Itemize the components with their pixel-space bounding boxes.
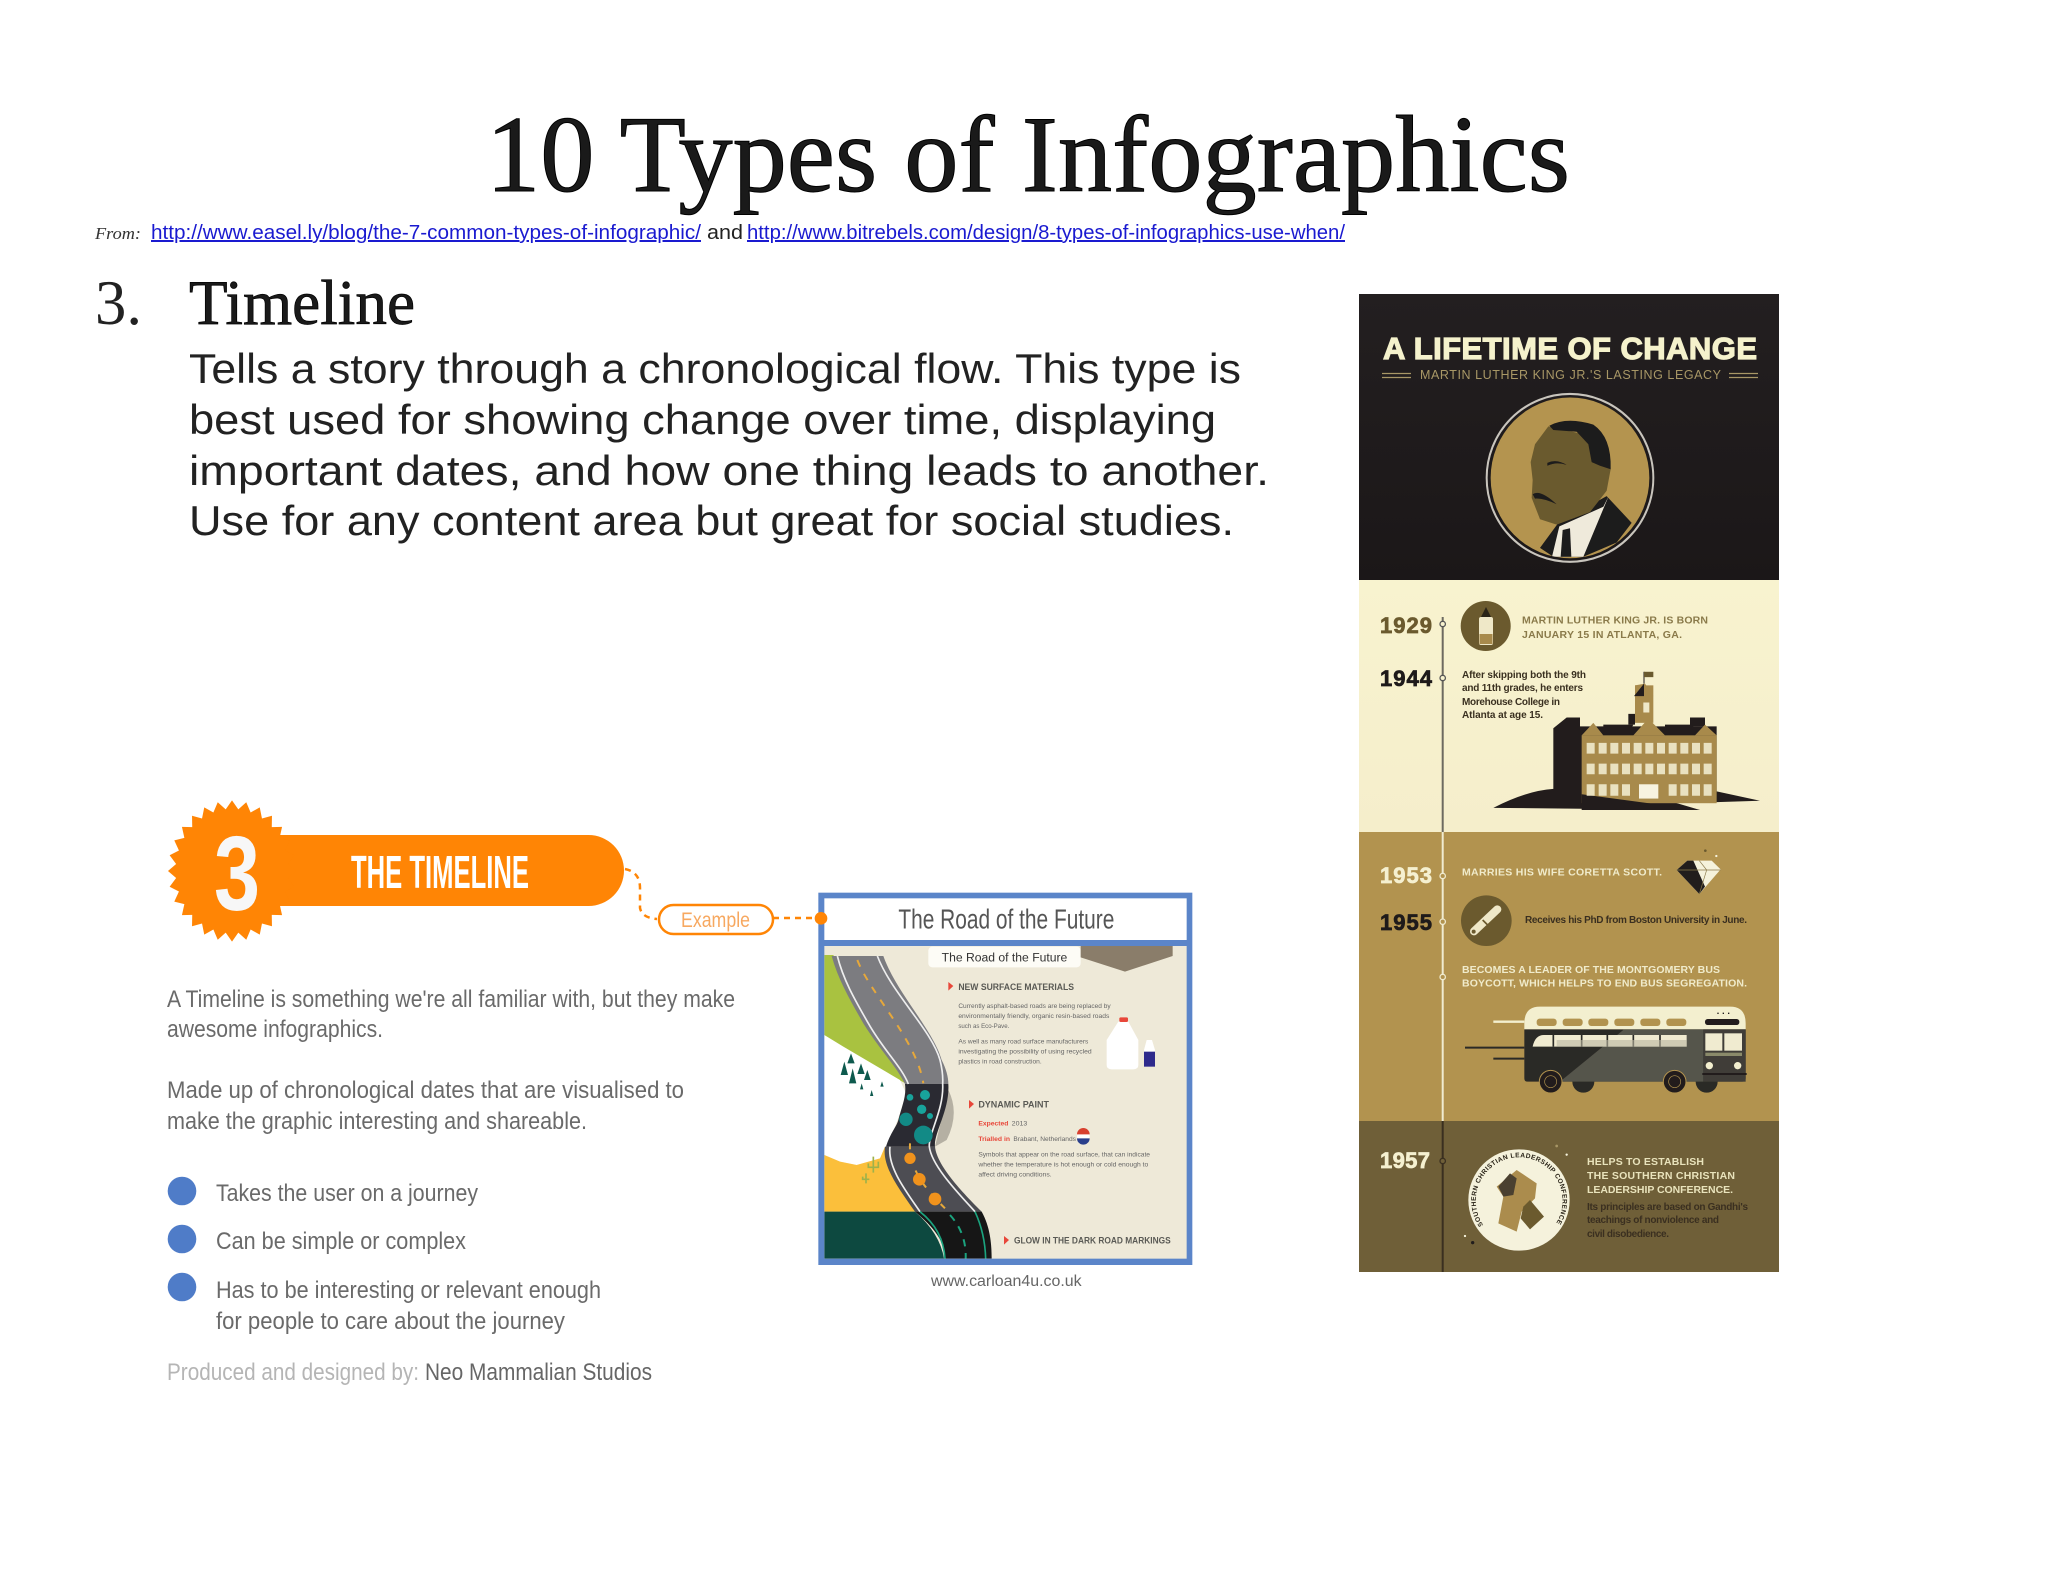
section: dynamic paint: Brabant, Netherlands [1013, 1136, 1077, 1143]
event 1944: 1944 [1380, 666, 1433, 691]
section: new surface materials: NEW SURFACE MATERIALS [958, 982, 1074, 992]
event 1957: THE SOUTHERN CHRISTIAN [1587, 1170, 1735, 1182]
timeline axis [1442, 617, 1444, 832]
blue frame and title band [818, 893, 1192, 1265]
section: new surface materials: plastics in road construction. [958, 1059, 1042, 1066]
intro paragraph: Made up of chronological dates that are visualised to [167, 1077, 684, 1104]
icon: conference badge with clasped hands [1464, 1144, 1570, 1251]
example pill: Example [681, 909, 750, 932]
event 1944: Atlanta at age 15. [1462, 710, 1543, 721]
portrait medallion [1487, 394, 1653, 562]
event 1957: HELPS TO ESTABLISH [1587, 1156, 1704, 1168]
event 1955: 1955 [1380, 910, 1432, 935]
illustration: college building [1493, 672, 1760, 810]
event: bus boycott: BECOMES A LEADER OF THE MONTGOMERY BUS [1462, 964, 1720, 976]
event 1944 [1380, 666, 1586, 721]
section: dynamic paint: 2013 [1012, 1121, 1028, 1128]
event 1957: 1957 [1380, 1148, 1430, 1173]
event 1953: MARRIES HIS WIFE CORETTA SCOTT. [1462, 867, 1662, 879]
example pill [659, 905, 773, 934]
description text: Tells a story through a chronological flow. This type is [189, 345, 1241, 392]
header title: A LIFETIME OF CHANGE [1383, 331, 1757, 366]
event: bus boycott [1440, 964, 1747, 990]
source line with links [94, 222, 1345, 244]
description text: Use for any content area but great for social studies. [189, 497, 1234, 544]
event 1929: 1929 [1380, 613, 1432, 638]
source line with links: http://www.easel.ly/blog/the-7-common-types-of-infographic/ [151, 222, 701, 244]
event 1953: 1953 [1380, 863, 1432, 888]
event 1957 [1380, 1148, 1748, 1240]
description text [189, 345, 1269, 544]
dark header background [1359, 294, 1779, 580]
panel: road of the future example [815, 893, 1192, 1290]
section: new surface materials: As well as many road surface manufacturers [958, 1039, 1089, 1046]
icon: orange number badge: 3 [214, 815, 260, 933]
section: dynamic paint: Symbols that appear on the road surface, that can indicate [978, 1151, 1150, 1158]
connector: dashed line to example [625, 869, 820, 919]
credit line: Produced and designed by: [167, 1359, 419, 1386]
section: dynamic paint: Expected [978, 1121, 1008, 1128]
event 1944: and 11th grades, he enters [1462, 683, 1583, 694]
event 1957: teachings of nonviolence and [1587, 1215, 1719, 1226]
section: dynamic paint: affect driving conditions. [978, 1171, 1052, 1178]
title: 10 Types of Infographics [486, 94, 1570, 215]
event 1953 [1380, 863, 1662, 888]
section heading: 3. [95, 267, 142, 338]
section heading: Timeline [189, 267, 415, 338]
event 1944: Morehouse College in [1462, 697, 1560, 708]
bullet list: Has to be interesting or relevant enough [216, 1277, 601, 1304]
event 1957: Its principles are based on Gandhi's [1587, 1202, 1748, 1213]
olive section background [1359, 1121, 1779, 1272]
credit line [167, 1359, 652, 1386]
intro paragraph: make the graphic interesting and shareable. [167, 1108, 587, 1135]
tan section background [1359, 832, 1779, 1121]
section: dynamic paint: Trialled in [978, 1136, 1010, 1143]
inner title: The Road of the Future [942, 951, 1067, 965]
source line with links: and [707, 222, 743, 244]
event 1929: MARTIN LUTHER KING JR. IS BORN [1522, 614, 1708, 626]
event 1955 [1380, 910, 1747, 935]
icon: orange number badge [168, 800, 624, 942]
intro paragraph: A Timeline is something we're all familiar with, but they make [167, 986, 735, 1013]
intro paragraph [167, 986, 735, 1135]
illustration: bus [1465, 1007, 1747, 1093]
section: dynamic paint: whether the temperature is hot enough or cold enough to [977, 1161, 1149, 1168]
bullet list: Takes the user on a journey [216, 1180, 478, 1207]
event 1929 [1380, 601, 1708, 651]
bullet list: Can be simple or complex [216, 1228, 466, 1255]
icon: diploma scroll [1461, 895, 1512, 946]
panel: a lifetime of change [1359, 294, 1779, 1272]
inner title [928, 946, 1173, 972]
section: new surface materials: such as Eco-Pave. [958, 1023, 1009, 1030]
description text: important dates, and how one thing leads to another. [189, 447, 1269, 494]
section: glow in the dark road markings: GLOW IN THE DARK ROAD MARKINGS [1014, 1235, 1171, 1245]
bullet list [168, 1177, 601, 1335]
icons: trees, snow crystals, suns, cactus [841, 1053, 941, 1205]
frame url caption: www.carloan4u.co.uk [930, 1273, 1082, 1290]
credit line: Neo Mammalian Studios [425, 1359, 652, 1386]
bullet list: for people to care about the journey [216, 1308, 565, 1335]
event 1955: Receives his PhD from Boston University in June. [1525, 915, 1747, 926]
section: dynamic paint: DYNAMIC PAINT [978, 1100, 1049, 1110]
icon: diamond [1677, 849, 1721, 894]
icon: conference badge with clasped hands: SOUTHERN CHRISTIAN LEADERSHIP CONFERENCE [1471, 1152, 1568, 1227]
source line with links: From: [94, 224, 141, 243]
description text: best used for showing change over time, displaying [189, 396, 1216, 443]
connector dot [815, 912, 827, 925]
section: new surface materials: Currently asphalt-based roads are being replaced by [958, 1003, 1111, 1010]
heading: the timeline: THE TIMELINE [351, 846, 529, 898]
header subtitle: MARTIN LUTHER KING JR.'S LASTING LEGACY [1420, 368, 1722, 382]
section: new surface materials: investigating the possibility of using recycled [958, 1049, 1092, 1056]
road illustration [824, 955, 992, 1259]
icon: plastic bottles [1107, 1017, 1155, 1069]
event 1957: LEADERSHIP CONFERENCE. [1587, 1184, 1733, 1196]
event 1944: After skipping both the 9th [1462, 670, 1586, 681]
source line with links: http://www.bitrebels.com/design/8-types-of-infographics-use-when/ [747, 222, 1345, 244]
event 1929: JANUARY 15 IN ATLANTA, GA. [1522, 629, 1682, 641]
section: new surface materials: environmentally friendly, organic resin-based roads [958, 1013, 1110, 1020]
frame title: The Road of the Future [898, 903, 1114, 934]
intro paragraph: awesome infographics. [167, 1016, 383, 1043]
event: bus boycott: BOYCOTT, WHICH HELPS TO END BUS SEGREGATION. [1462, 978, 1747, 990]
cream section background [1359, 580, 1779, 832]
section: new surface materials [948, 982, 1111, 1066]
section: dynamic paint [969, 1100, 1150, 1178]
panel: the timeline explainer [167, 800, 820, 1386]
event 1957: civil disobedience. [1587, 1229, 1669, 1240]
